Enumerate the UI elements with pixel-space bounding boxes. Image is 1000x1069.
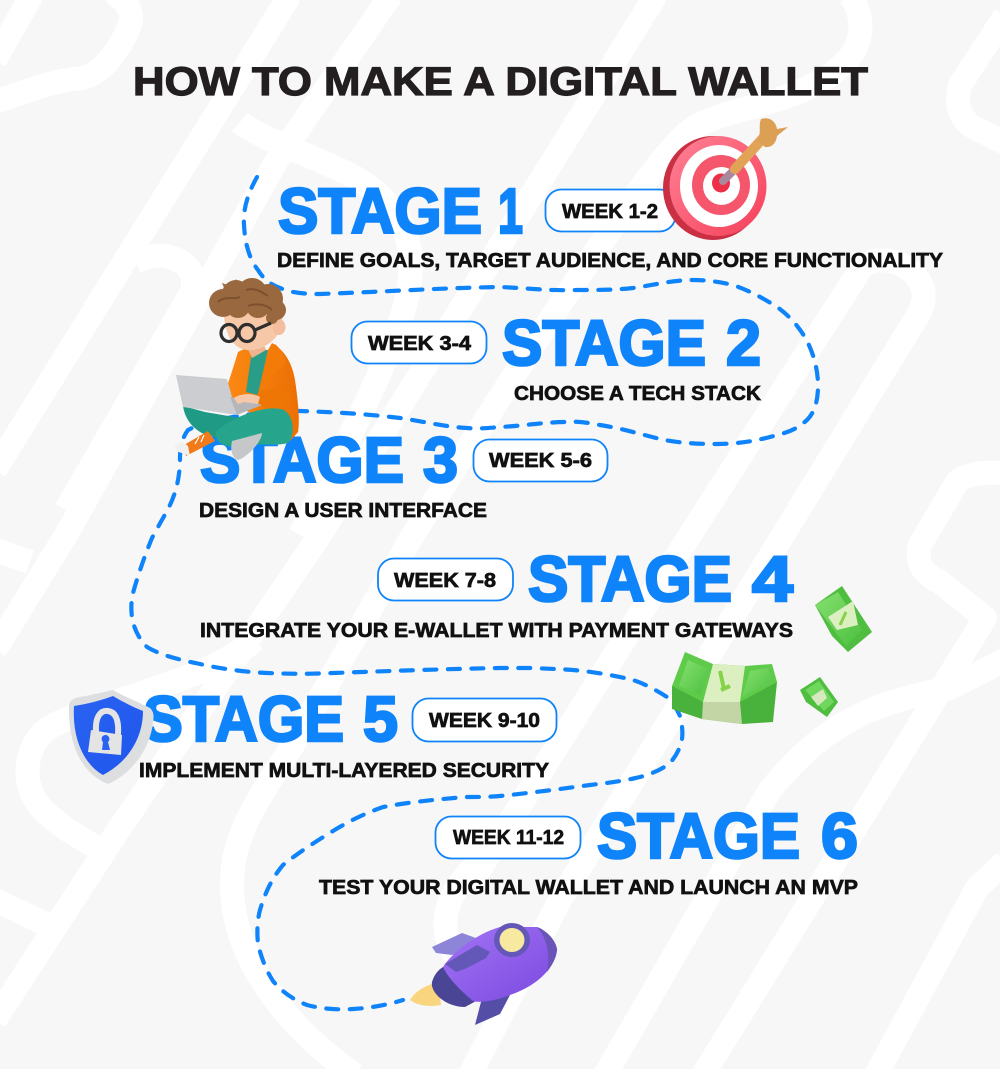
- stage 6 description: TEST YOUR DIGITAL WALLET AND LAUNCH AN MVP: [319, 876, 858, 899]
- stage 3 description: DESIGN A USER INTERFACE: [199, 499, 487, 522]
- small note bundle: [800, 677, 838, 717]
- icon: security shield with padlock: [69, 690, 154, 784]
- stage 2 heading: 2: [726, 307, 761, 379]
- stage 6 week badge: [436, 816, 580, 858]
- stage 2 week badge: WEEK 3-4: [368, 333, 472, 355]
- stage 6: [319, 800, 858, 899]
- stage 4 description: INTEGRATE YOUR E-WALLET WITH PAYMENT GATEWAYS: [200, 619, 793, 642]
- stage 3: [199, 424, 608, 522]
- stage 5 heading: STAGE: [143, 683, 344, 755]
- stage 5 week badge: [412, 698, 556, 742]
- stage 5: [139, 683, 556, 782]
- icon: target with dart: [663, 118, 788, 240]
- stage 4 week badge: WEEK 7-8: [394, 570, 496, 592]
- stage 4 heading: STAGE: [528, 543, 732, 615]
- large stack: [672, 652, 777, 724]
- stage 6 heading: 6: [821, 800, 858, 872]
- stage 1 heading: 1: [498, 175, 523, 247]
- glasses: [221, 323, 271, 342]
- legs: [183, 406, 240, 437]
- stage 1 description: DEFINE GOALS, TARGET AUDIENCE, AND CORE FUNCTIONALITY: [277, 249, 943, 272]
- stage 4 week badge: [378, 558, 513, 600]
- stage 4 heading: 4: [752, 543, 793, 615]
- hoodie: [225, 343, 299, 441]
- stage 1 week badge: [546, 190, 676, 232]
- stage 4: [200, 543, 793, 642]
- hands: [234, 394, 260, 404]
- left shoe: [184, 431, 215, 456]
- laptop: [176, 375, 237, 415]
- stage 1 heading: STAGE: [278, 175, 482, 247]
- icon: purple rocket: [410, 923, 557, 1025]
- stage 2 description: CHOOSE A TECH STACK: [514, 382, 761, 405]
- icon: developer with laptop: [175, 278, 299, 460]
- stage 2 week badge: [352, 322, 486, 364]
- stage 2: [352, 307, 761, 405]
- right shoe: [231, 433, 262, 460]
- neck and face: [246, 340, 266, 358]
- stage 3 heading: 3: [423, 424, 458, 496]
- stage 6 heading: STAGE: [597, 800, 800, 872]
- stage 1 week badge: WEEK 1-2: [562, 201, 658, 223]
- stage 5 description: IMPLEMENT MULTI-LAYERED SECURITY: [139, 759, 549, 782]
- dashed route path: [131, 177, 818, 1009]
- hair: [209, 278, 286, 324]
- stage 6 week badge: WEEK 11-12: [453, 827, 564, 849]
- medium note bundle: [815, 586, 872, 652]
- stage 3 week badge: [474, 440, 608, 482]
- stage 5 heading: 5: [363, 683, 398, 755]
- icon: money stacks: [672, 586, 872, 724]
- stage 3 heading: STAGE: [200, 424, 404, 496]
- stage 2 heading: STAGE: [502, 307, 706, 379]
- title: HOW TO MAKE A DIGITAL WALLET: [133, 60, 868, 104]
- stage 5 week badge: WEEK 9-10: [429, 710, 540, 732]
- stage 3 week badge: WEEK 5-6: [489, 450, 592, 472]
- stage 1: [277, 175, 943, 272]
